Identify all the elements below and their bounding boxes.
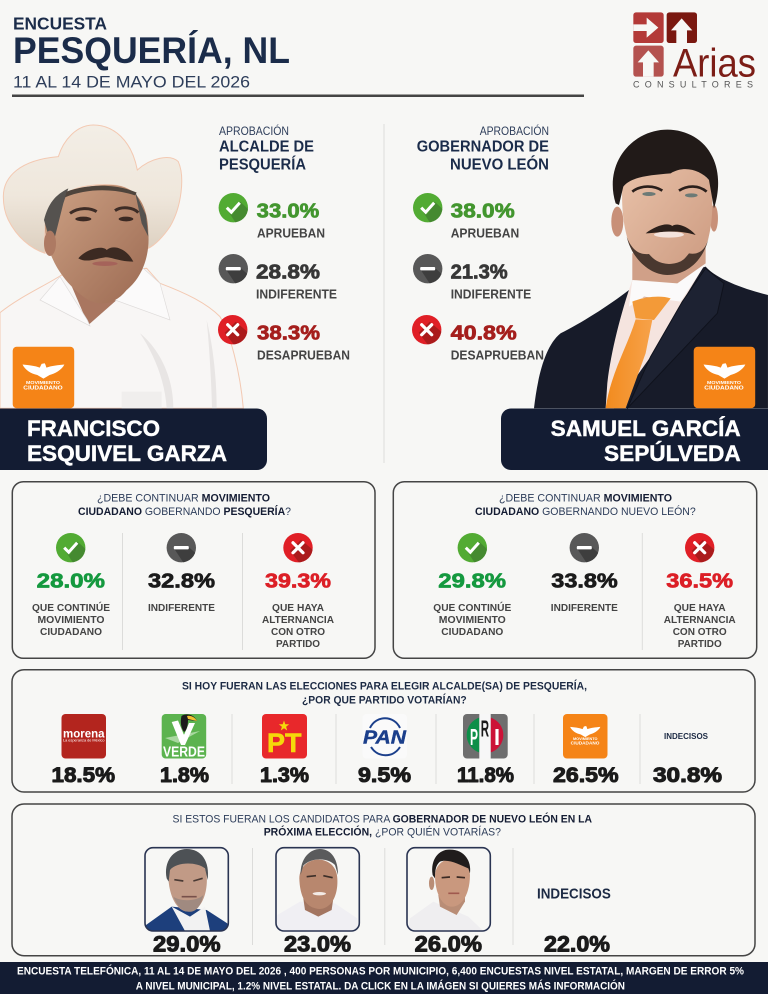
panel: continuar MC en Nuevo León: CIUDADANO bbox=[441, 626, 503, 638]
logo: PAN bbox=[362, 714, 407, 758]
panel: continuar MC en Nuevo León: PARTIDO bbox=[678, 638, 722, 650]
logo: Movimiento Ciudadano: CIUDADANO bbox=[571, 740, 600, 746]
approval panel: gobernador de Nuevo León: 40.8% bbox=[451, 322, 517, 344]
panel: voto por partido: 30.8% bbox=[653, 764, 722, 787]
name banner: Francisco Esquivel Garza: ESQUIVEL GARZA bbox=[27, 441, 227, 466]
panel: continuar MC en Pesquería: CIUDADANO bbox=[40, 626, 102, 638]
approval panel: alcalde de Pesquería bbox=[218, 123, 350, 362]
logo: Arias Consultores: Arias bbox=[673, 42, 756, 86]
icon: continue bbox=[56, 533, 95, 572]
panel: continuar MC en Nuevo León: 36.5% bbox=[666, 569, 733, 592]
logo: Partido Verde bbox=[162, 714, 206, 761]
logo: Morena: morena bbox=[63, 726, 105, 740]
panel: continuar MC en Nuevo León: 29.8% bbox=[438, 569, 506, 592]
panel: continuar MC en Pesquería: ¿DEBE CONTINUAR MOVIMIENTO bbox=[97, 493, 270, 505]
party badge: Movimiento Ciudadano (right): MOVIMIENTO bbox=[707, 380, 742, 385]
panel: voto por partido: 11.8% bbox=[457, 764, 514, 787]
panel: voto por candidato a gobernador: PRÓXIMA ELECCIÓN, ¿POR QUIÉN VOTARÍAS? bbox=[264, 825, 501, 838]
panel: continuar MC en Pesquería: 28.0% bbox=[37, 569, 105, 592]
panel: voto por candidato a gobernador: INDECISOS bbox=[537, 886, 611, 903]
icon: approve bbox=[413, 193, 452, 232]
panel: voto por candidato a gobernador: 26.0% bbox=[415, 932, 482, 957]
panel: voto por partido: SI HOY FUERAN LAS ELECCIONES PARA ELEGIR ALCALDE(SA) DE PESQUERÍA, bbox=[182, 680, 587, 693]
panel: continuar MC en Nuevo León: CIUDADANO GOBERNANDO NUEVO LEÓN? bbox=[475, 505, 696, 518]
panel: continuar MC en Pesquería: PARTIDO bbox=[276, 638, 320, 650]
photo: Samuel García Sepúlveda bbox=[534, 130, 768, 408]
logo: PRI: I bbox=[494, 724, 500, 750]
icon: disapprove bbox=[412, 315, 451, 354]
party badge: Movimiento Ciudadano (left): CIUDADANO bbox=[23, 386, 63, 392]
approval panel: alcalde de Pesquería: APROBACIÓN bbox=[219, 123, 289, 138]
logo: PAN: PAN bbox=[363, 728, 407, 748]
icon: indifferent bbox=[219, 254, 257, 293]
name banner: Francisco Esquivel Garza: FRANCISCO bbox=[27, 416, 160, 441]
icon: indifferent bbox=[413, 254, 452, 293]
icon: approve bbox=[219, 193, 257, 232]
panel: voto por candidato a gobernador: 23.0% bbox=[284, 932, 351, 957]
party badge: Movimiento Ciudadano (right) bbox=[694, 347, 755, 408]
panel: voto por candidato a gobernador: 22.0% bbox=[544, 932, 610, 957]
icon: indifferent bbox=[167, 533, 205, 572]
party badge: Movimiento Ciudadano (left) bbox=[13, 347, 74, 408]
panel: continuar MC en Pesquería: QUE CONTINÚE bbox=[32, 601, 110, 614]
panel: continuar MC en Pesquería: MOVIMIENTO bbox=[38, 614, 104, 626]
approval panel: gobernador de Nuevo León: 38.0% bbox=[451, 201, 515, 223]
icon: indifferent bbox=[570, 533, 608, 572]
approval panel: alcalde de Pesquería: PESQUERÍA bbox=[219, 156, 306, 173]
logo: Partido Verde: VERDE bbox=[163, 744, 205, 761]
panel: continuar MC en Pesquería: QUE HAYA bbox=[272, 602, 324, 614]
name banner: Samuel García Sepúlveda: SEPÚLVEDA bbox=[604, 441, 741, 466]
header titles bbox=[12, 13, 584, 97]
icon: disapprove bbox=[218, 315, 257, 354]
panel: voto por partido: 9.5% bbox=[358, 764, 411, 787]
approval panel: gobernador de Nuevo León: APRUEBAN bbox=[451, 226, 519, 241]
panel: voto por partido: INDECISOS bbox=[664, 731, 708, 741]
logo: Arias Consultores: CONSULTORES bbox=[633, 80, 753, 90]
footer note: A NIVEL MUNICIPAL, 1.2% NIVEL ESTATAL. DA CLICK EN LA IMÁGEN SI QUIERES MÁS INFORMACIÓN bbox=[136, 979, 625, 992]
approval panel: alcalde de Pesquería: INDIFERENTE bbox=[256, 287, 337, 302]
panel: voto por partido: 26.5% bbox=[553, 764, 619, 787]
approval panel: gobernador de Nuevo León: DESAPRUEBAN bbox=[451, 347, 544, 362]
approval panel: alcalde de Pesquería: APRUEBAN bbox=[257, 226, 325, 241]
panel: continuar MC en Pesquería: ALTERNANCIA bbox=[262, 614, 334, 626]
logo: Arias Consultores bbox=[633, 12, 756, 90]
panel: continuar MC en Nuevo León bbox=[393, 482, 757, 658]
approval panel: gobernador de Nuevo León bbox=[412, 123, 549, 362]
photo: candidato 1 bbox=[145, 848, 228, 931]
center divider bbox=[383, 124, 385, 463]
approval panel: gobernador de Nuevo León: INDIFERENTE bbox=[451, 287, 532, 302]
party badge: Movimiento Ciudadano (left): MOVIMIENTO bbox=[26, 380, 61, 385]
panel: continuar MC en Nuevo León: 33.8% bbox=[551, 569, 618, 592]
panel: continuar MC en Pesquería: CIUDADANO GOBERNANDO PESQUERÍA? bbox=[78, 505, 291, 518]
icon: change bbox=[283, 533, 322, 572]
name banner: Samuel García Sepúlveda bbox=[501, 408, 768, 470]
name banner: Samuel García Sepúlveda: SAMUEL GARCÍA bbox=[551, 416, 741, 441]
name banner: Francisco Esquivel Garza bbox=[0, 408, 267, 470]
icon: continue bbox=[458, 533, 496, 572]
logo: PRI bbox=[463, 714, 508, 758]
header titles: 11 AL 14 DE MAYO DEL 2026 bbox=[13, 72, 250, 91]
panel: continuar MC en Pesquería: INDIFERENTE bbox=[148, 602, 215, 614]
panel: voto por candidato a gobernador bbox=[12, 804, 755, 957]
panel: continuar MC en Nuevo León: QUE CONTINÚE bbox=[433, 601, 511, 614]
panel: continuar MC en Nuevo León: QUE HAYA bbox=[674, 602, 726, 614]
photo: candidato 3 bbox=[407, 848, 490, 931]
panel: continuar MC en Nuevo León: INDIFERENTE bbox=[551, 602, 618, 614]
photo: candidato 2 bbox=[276, 848, 359, 931]
panel: continuar MC en Nuevo León: ¿DEBE CONTINUAR MOVIMIENTO bbox=[499, 493, 672, 505]
panel: continuar MC en Pesquería bbox=[12, 482, 375, 658]
approval panel: alcalde de Pesquería: DESAPRUEBAN bbox=[257, 347, 350, 362]
approval panel: gobernador de Nuevo León: GOBERNADOR DE bbox=[417, 139, 549, 156]
footer note bbox=[0, 962, 768, 994]
approval panel: alcalde de Pesquería: 38.3% bbox=[257, 322, 320, 344]
logo: Morena: La esperanza de México bbox=[63, 738, 105, 742]
logo: Morena bbox=[62, 714, 106, 758]
panel: continuar MC en Nuevo León: MOVIMIENTO bbox=[439, 614, 506, 626]
panel: voto por candidato a gobernador: SI ESTOS FUERAN LOS CANDIDATOS PARA GOBERNADOR DE NUEVO LEÓN EN LA bbox=[172, 813, 592, 826]
logo: Movimiento Ciudadano bbox=[563, 714, 608, 758]
icon: change bbox=[685, 533, 724, 572]
panel: voto por candidato a gobernador: 29.0% bbox=[153, 932, 221, 957]
header titles: PESQUERÍA, NL bbox=[13, 30, 290, 71]
panel: continuar MC en Nuevo León: ALTERNANCIA bbox=[664, 614, 736, 626]
panel: voto por partido: 18.5% bbox=[52, 764, 115, 787]
logo: Movimiento Ciudadano: MOVIMIENTO bbox=[573, 737, 598, 741]
photo: Francisco Esquivel Garza bbox=[0, 125, 243, 408]
panel: voto por partido: ¿POR QUE PARTIDO VOTARÍAN? bbox=[302, 693, 467, 706]
party badge: Movimiento Ciudadano (right): CIUDADANO bbox=[704, 386, 744, 392]
logo: PRI: P bbox=[470, 724, 478, 750]
logo: PRI: R bbox=[481, 716, 489, 742]
approval panel: gobernador de Nuevo León: APROBACIÓN bbox=[480, 123, 549, 138]
approval panel: alcalde de Pesquería: ALCALDE DE bbox=[219, 139, 314, 156]
panel: continuar MC en Pesquería: 39.3% bbox=[265, 569, 331, 592]
panel: voto por partido: 1.8% bbox=[160, 764, 209, 787]
header titles: ENCUESTA bbox=[13, 13, 107, 33]
logo: PT: PT bbox=[267, 728, 302, 758]
panel: voto por partido bbox=[12, 670, 755, 792]
approval panel: alcalde de Pesquería: 33.0% bbox=[257, 201, 319, 223]
panel: voto por partido: 1.3% bbox=[260, 764, 309, 787]
approval panel: gobernador de Nuevo León: 21.3% bbox=[451, 262, 508, 284]
approval panel: alcalde de Pesquería: 28.8% bbox=[256, 262, 320, 284]
approval panel: gobernador de Nuevo León: NUEVO LEÓN bbox=[450, 155, 549, 173]
panel: continuar MC en Nuevo León: CON OTRO bbox=[673, 626, 727, 638]
panel: continuar MC en Pesquería: CON OTRO bbox=[271, 626, 325, 638]
logo: PT bbox=[262, 714, 307, 758]
panel: continuar MC en Pesquería: 32.8% bbox=[148, 569, 215, 592]
